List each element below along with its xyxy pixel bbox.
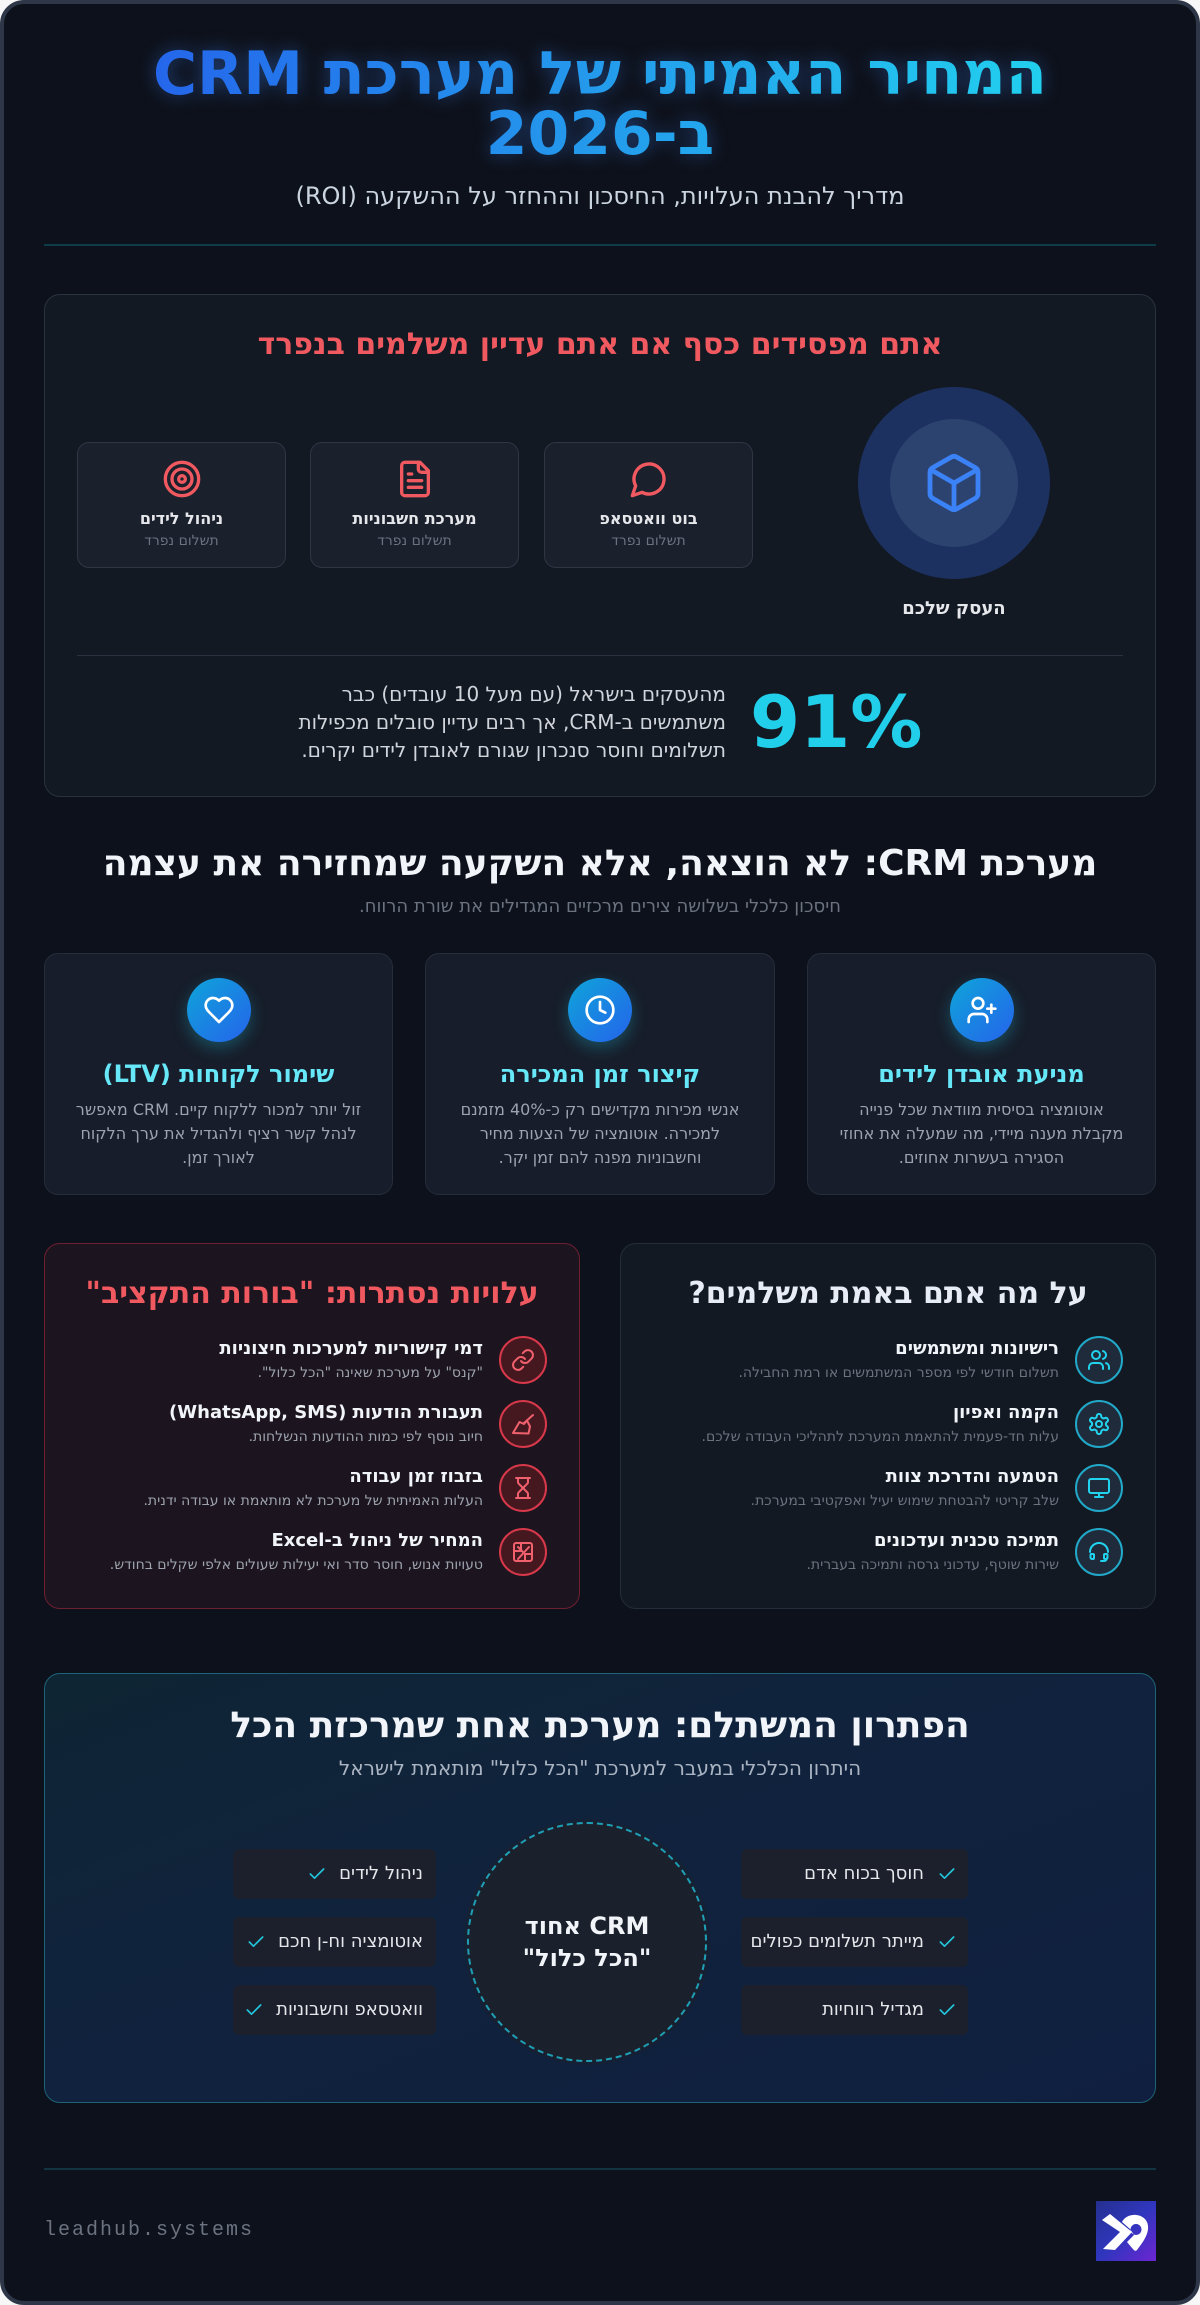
- central CRM circle: [467, 1822, 707, 2062]
- benefit: saves manpower: [741, 1849, 968, 1899]
- item text: עלות חד-פעמית להתאמת המערכת לתהליכי העבודה שלכם.: [702, 1429, 1059, 1445]
- item text: חיוב נוסף לפי כמות ההודעות הנשלחות.: [249, 1429, 483, 1445]
- item: training: [751, 1464, 1123, 1512]
- item title: תמיכה טכנית ועדכונים: [874, 1530, 1059, 1551]
- check icon: [310, 1868, 324, 1879]
- card title: מניעת אובדן לידים: [878, 1060, 1085, 1088]
- section subheading: חיסכון כלכלי בשלושה צירים מרכזיים המגדילים את שורת הרווח.: [359, 896, 841, 917]
- icon: hourglass: [499, 1464, 547, 1512]
- central CRM circle: CRM אחוד: [525, 1912, 649, 1940]
- card note: תשלום נפרד: [377, 533, 452, 549]
- card: lead management: [77, 442, 286, 568]
- icon: heart: [186, 978, 250, 1042]
- item text: העלות האמיתית של מערכת לא מותאמת או עבודה ידנית.: [143, 1493, 483, 1509]
- benefit text: ניהול לידים: [339, 1863, 423, 1884]
- card text: לנהל קשר רציף ולהגדיל את ערך הלקוח: [80, 1124, 357, 1143]
- feature: lead management: [233, 1849, 436, 1899]
- item: connectors: [219, 1336, 547, 1384]
- item text: תשלום חודשי לפי מספר המשתמשים או רמת החבילה.: [738, 1365, 1059, 1381]
- item title: דמי קישוריות למערכות חיצוניות: [219, 1338, 483, 1359]
- panel heading: הפתרון המשתלם: מערכת אחת שמרכזת הכל: [230, 1705, 970, 1746]
- card title: ניהול לידים: [140, 509, 223, 528]
- panel heading: על מה אתם באמת משלמים?: [688, 1276, 1088, 1311]
- item title: המחיר של ניהול ב-Excel: [271, 1530, 483, 1551]
- icon: users: [1075, 1336, 1123, 1384]
- icon: brush: [499, 1400, 547, 1448]
- subtitle: מדריך להבנת העלויות, החיסכון וההחזר על ההשקעה (ROI): [295, 182, 905, 210]
- item title: רישיונות ומשתמשים: [895, 1338, 1059, 1359]
- item: support: [806, 1528, 1123, 1576]
- card text: לאורך זמן.: [182, 1148, 255, 1167]
- feature: whatsapp and invoices: [233, 1985, 436, 2035]
- card text: אוטומציה בסיסית מוודאת שכל פנייה: [859, 1100, 1104, 1119]
- card text: [461, 1100, 739, 1167]
- card text: וחשבוניות מפנה להם זמן יקר.: [499, 1148, 701, 1167]
- icon: document: [400, 460, 430, 498]
- icon: your business circle: [858, 387, 1050, 579]
- stat description: מהעסקים בישראל (עם מעל 10 עובדים) כבר: [342, 682, 726, 706]
- card title: שימור לקוחות (LTV): [103, 1060, 334, 1088]
- icon: link: [499, 1336, 547, 1384]
- check icon: [248, 1936, 264, 1947]
- label: your business: העסק שלכם: [902, 598, 1006, 619]
- central CRM circle: "הכל כלול": [523, 1944, 651, 1972]
- panel subheading: היתרון הכלכלי במעבר למערכת "הכל כלול" מותאמת לישראל: [339, 1756, 861, 1780]
- card title: מערכת חשבוניות: [352, 509, 477, 528]
- card text: [840, 1100, 1123, 1167]
- item: wasted time: [143, 1464, 547, 1512]
- card text: זול יותר למכור ללקוח קיים. CRM מאפשר: [76, 1100, 361, 1119]
- item text: "קנס" על מערכת שאינה "הכל כלול".: [258, 1365, 483, 1381]
- icon: gear: [1075, 1400, 1123, 1448]
- card text: מקבלת מענה מיידי, מה שמעלה את אחוזי: [840, 1124, 1123, 1143]
- icon: spreadsheet: [499, 1528, 547, 1576]
- title: המחיר האמיתי של מערכת CRM ב-2026: [153, 39, 1047, 169]
- panel: complete solution: [44, 1673, 1156, 2103]
- item: messaging: [169, 1400, 547, 1448]
- stat description: תשלומים וחוסר סנכרון שגורם לאובדן לידים יקרים.: [301, 738, 726, 762]
- card: accounting system: [310, 442, 519, 568]
- check icon: [940, 1868, 954, 1879]
- check icon: [246, 2004, 262, 2015]
- item title: תעבורת הודעות (WhatsApp, SMS): [169, 1402, 483, 1423]
- panel divider: [77, 655, 1123, 656]
- item text: שירות שוטף, עדכוני גרסה ותמיכה בעברית.: [806, 1557, 1059, 1573]
- card title: קיצור זמן המכירה: [500, 1060, 700, 1088]
- panel heading: עלויות נסתרות: "בורות התקציב": [85, 1276, 539, 1311]
- stat description: [298, 682, 726, 762]
- card note: תשלום נפרד: [611, 533, 686, 549]
- benefit text: וואטסאפ וחשבוניות: [276, 1999, 423, 2020]
- benefit text: חוסך בכוח אדם: [804, 1863, 924, 1884]
- inner circle: [890, 419, 1018, 547]
- benefit: removes duplicate payments: [741, 1917, 968, 1967]
- card text: [76, 1100, 361, 1167]
- stat: 91%: 91%: [750, 680, 922, 764]
- item title: הקמה ואפיון: [953, 1402, 1059, 1423]
- logo: [1096, 2201, 1156, 2261]
- item: excel: [110, 1528, 547, 1576]
- panel: hidden costs: [44, 1243, 580, 1609]
- footer website: leadhub.systems: [44, 2219, 254, 2242]
- card text: למכירה. אוטומציה של הצעות מחיר: [480, 1124, 720, 1143]
- card text: הסגירה בעשרות אחוזים.: [899, 1148, 1064, 1167]
- footer divider: [44, 2168, 1156, 2170]
- heading: losing money: אתם מפסידים כסף אם אתם עדיין משלמים בנפרד: [258, 327, 942, 362]
- stat description: משתמשים ב-CRM, אך רבים עדיין סובלים מכפילות: [298, 710, 726, 734]
- benefit text: מגדיל רווחיות: [822, 1999, 924, 2020]
- benefit text: אוטומציה וח-ן חכם: [278, 1931, 423, 1952]
- card: customer retention: [44, 953, 393, 1195]
- item: setup: [702, 1400, 1123, 1448]
- card: WhatsApp bot: [544, 442, 753, 568]
- header divider: [44, 244, 1156, 246]
- item text: טעויות אנוש, חוסר סדר ואי יעילות שעולים אלפי שקלים בחודש.: [110, 1557, 483, 1573]
- card note: תשלום נפרד: [144, 533, 219, 549]
- card: sales time: [425, 953, 775, 1195]
- card: lead loss prevention: [807, 953, 1156, 1195]
- icon: target: [164, 460, 200, 498]
- icon: monitor: [1075, 1464, 1123, 1512]
- card text: אנשי מכירות מקדישים רק כ-40% מזמנם: [461, 1100, 739, 1119]
- benefit text: מייתר תשלומים כפולים: [750, 1931, 924, 1952]
- icon: clock: [568, 978, 632, 1042]
- benefit: increases profit: [741, 1985, 968, 2035]
- icon: message: [630, 462, 666, 498]
- item title: בזבוז זמן עבודה: [349, 1466, 483, 1487]
- item text: שלב קריטי להבטחת שימוש יעיל ואפקטיבי במערכת.: [751, 1493, 1059, 1509]
- feature: automation and billing: [233, 1917, 436, 1967]
- icon: user plus: [950, 978, 1014, 1042]
- item title: הטמעה והדרכת צוות: [886, 1466, 1059, 1487]
- section heading: investment: מערכת CRM: לא הוצאה, אלא השקעה שמחזירה את עצמה: [103, 843, 1097, 884]
- check icon: [940, 1936, 954, 1947]
- item: licenses: [738, 1336, 1123, 1384]
- panel: what you really pay for: [620, 1243, 1156, 1609]
- check icon: [940, 2004, 954, 2015]
- card title: בוט וואטסאפ: [599, 509, 698, 528]
- icon: headset: [1075, 1528, 1123, 1576]
- panel: paying separately: [44, 294, 1156, 797]
